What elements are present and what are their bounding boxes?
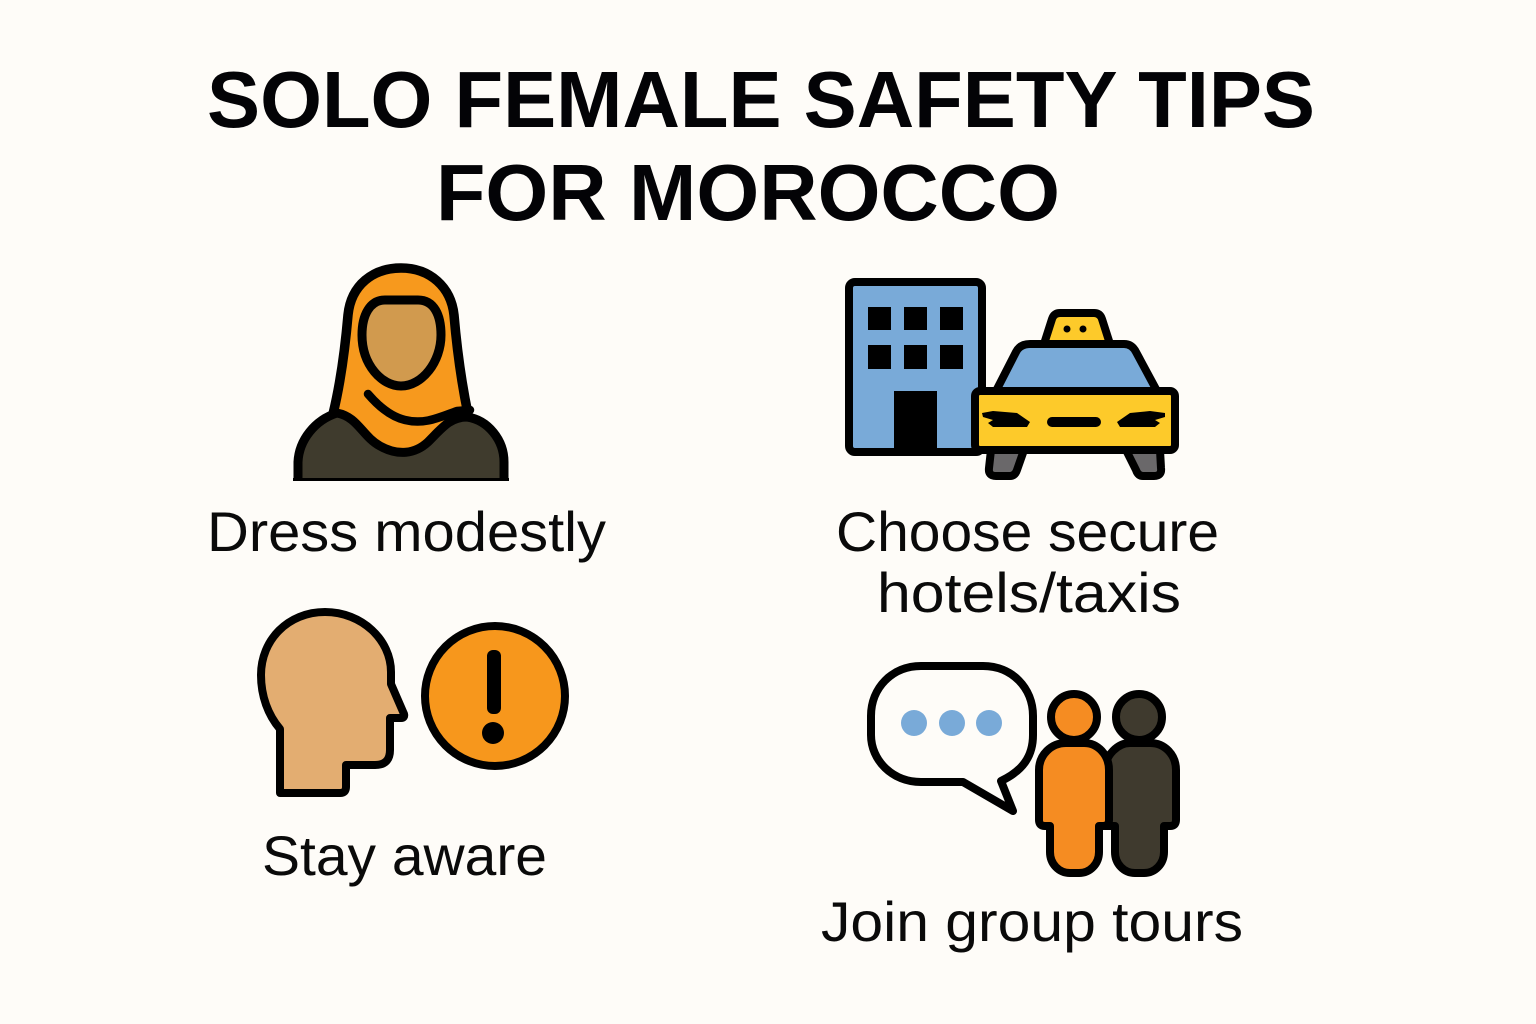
title xyxy=(207,55,1315,237)
panel: stay aware xyxy=(261,612,565,887)
label: dress modestly: Dress modestly xyxy=(207,500,606,563)
icon: taxi xyxy=(975,313,1175,476)
panel: dress modestly xyxy=(207,268,606,563)
title: SOLO FEMALE SAFETY TIPS xyxy=(207,55,1315,144)
icon: warning circle xyxy=(425,626,565,766)
panel: join group tours xyxy=(821,666,1243,953)
label: stay aware: Stay aware xyxy=(262,824,547,887)
icon: hotel building xyxy=(849,282,982,453)
label: choose secure hotels/taxis: Choose secure xyxy=(836,500,1219,563)
panel: secure hotels and taxis xyxy=(836,282,1219,624)
label: choose secure hotels/taxis: hotels/taxis xyxy=(877,561,1181,624)
icon: speech bubble xyxy=(871,666,1033,811)
title: FOR MOROCCO xyxy=(436,148,1060,237)
label: join group tours: Join group tours xyxy=(821,890,1243,953)
icon: woman in headscarf xyxy=(293,268,509,481)
icon: head profile xyxy=(261,612,404,793)
icon: two people xyxy=(1039,694,1176,873)
label: choose secure hotels/taxis xyxy=(836,500,1219,624)
